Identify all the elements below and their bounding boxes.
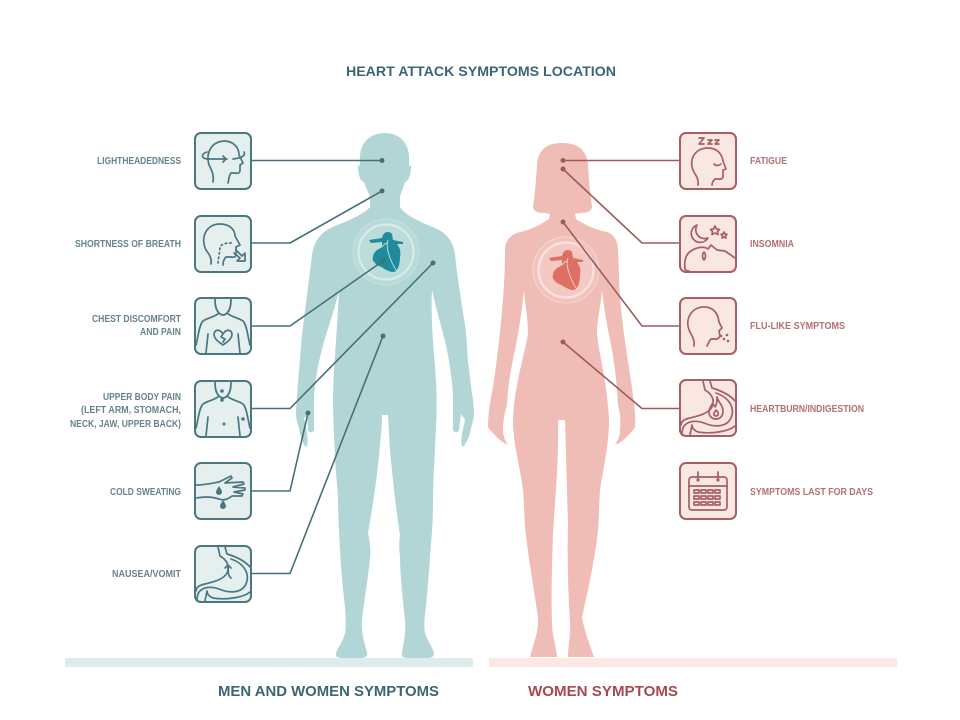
icon: chest discomfort	[195, 298, 251, 354]
heading: women symptoms: WOMEN SYMPTOMS	[528, 683, 678, 700]
label: cold sweating: COLD SWEATING	[110, 487, 181, 498]
label: chest discomfort and pain	[92, 314, 181, 338]
label: upper body pain: UPPER BODY PAIN	[103, 392, 181, 403]
label: upper body pain	[70, 392, 181, 430]
label: chest discomfort and pain: AND PAIN	[140, 327, 181, 338]
connector lines: female	[560, 158, 680, 408]
icon: heartburn	[680, 380, 736, 436]
label: heartburn/indigestion: HEARTBURN/INDIGESTION	[750, 404, 864, 415]
label: fatigue: FATIGUE	[750, 156, 787, 167]
label: symptoms last for days: SYMPTOMS LAST FOR DAYS	[750, 487, 873, 498]
icon: upper body pain	[195, 381, 251, 437]
label: upper body pain: NECK, JAW, UPPER BACK)	[70, 419, 181, 430]
label: upper body pain: (LEFT ARM, STOMACH,	[81, 405, 181, 416]
label: shortness of breath: SHORTNESS OF BREATH	[75, 239, 181, 250]
icon: nausea/vomit	[195, 546, 251, 602]
female body silhouette	[488, 143, 635, 657]
female heart with rings	[533, 237, 599, 303]
title: HEART ATTACK SYMPTOMS LOCATION	[346, 63, 616, 79]
icon: fatigue	[680, 133, 736, 189]
label: chest discomfort and pain: CHEST DISCOMFORT	[92, 314, 181, 325]
icon: cold sweating	[195, 463, 251, 519]
label: flu-like symptoms: FLU-LIKE SYMPTOMS	[750, 321, 845, 332]
label: lightheadedness: LIGHTHEADEDNESS	[97, 156, 181, 167]
heading: men and women symptoms: MEN AND WOMEN SYMPTOMS	[218, 683, 439, 700]
base bar: women	[489, 658, 897, 667]
male heart with rings	[353, 219, 419, 285]
male body silhouette	[296, 133, 474, 658]
connector lines: male	[251, 158, 436, 574]
icon: insomnia	[680, 216, 736, 272]
icon: lightheadedness	[195, 133, 251, 189]
icon: shortness of breath	[195, 216, 251, 272]
label: nausea/vomit: NAUSEA/VOMIT	[112, 569, 181, 580]
icon: flu-like symptoms	[680, 298, 736, 354]
label: insomnia: INSOMNIA	[750, 239, 794, 250]
base bar: men and women	[65, 658, 473, 667]
icon: calendar	[680, 463, 736, 519]
